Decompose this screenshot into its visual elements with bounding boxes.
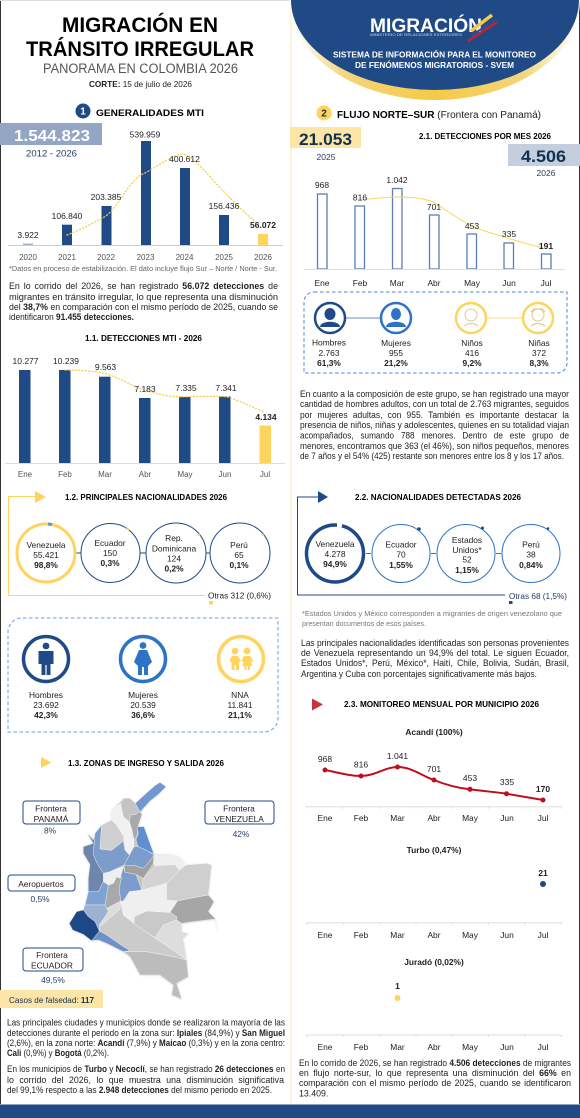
- Perú label: 65: [234, 550, 244, 560]
- nationalities circles: [17, 523, 270, 583]
- dot chart: Juradó: [306, 957, 562, 1052]
- line chart: Acandí: 335: [500, 777, 514, 787]
- line chart: Acandí: 453: [463, 773, 477, 783]
- otras nacionalidades note: Otras 312 (0,6%): [208, 592, 271, 600]
- bar chart: detecciones MTI 2026: 7.335: [175, 383, 197, 393]
- title block: CORTE: 15 de julio de 2026: [89, 79, 192, 89]
- callout: Frontera Panamá: Frontera: [35, 804, 67, 814]
- map: Colombia regions: [69, 782, 218, 999]
- bar chart: detecciones MTI 2026: Jul: [260, 470, 270, 479]
- dot chart: Juradó: Jul: [538, 1042, 548, 1052]
- dot chart: Turbo: Jun: [500, 930, 514, 940]
- bar chart: detecciones por mes: 816: [353, 192, 367, 202]
- region: Cundinamarca: [119, 867, 142, 901]
- dot chart: Juradó: Ene: [318, 1042, 333, 1052]
- dot chart: Juradó: Mar: [390, 1042, 405, 1052]
- paragraph: composición del grupo: menores, encontramos que 363 (el 46%), son niños pequeños, menores: [300, 441, 570, 451]
- bar chart: detecciones anuales: 2021: [58, 253, 76, 262]
- section heading 2: flujo norte-sur: [316, 106, 541, 121]
- República Dominicana label: Dominicana: [152, 544, 196, 554]
- bar chart: detecciones por mes: [304, 175, 565, 288]
- bar chart: detecciones anuales: 2026: [254, 253, 272, 262]
- stat: total 2025: [290, 127, 361, 162]
- Mujeres stats: 36,6%: [131, 710, 155, 720]
- region: La Guajira: [135, 782, 166, 812]
- heading 2.3 with arrow: 2.3. MONITOREO MENSUAL POR MUNICIPIO 2026: [344, 699, 539, 709]
- bar chart: detecciones MTI 2026: [5, 356, 285, 479]
- paragraph: principales nacionalidades: Las principales nacionalidades identificadas son personas provenientes: [301, 638, 570, 648]
- bar chart: detecciones anuales: 2020: [19, 253, 37, 262]
- line chart: Acandí: Ene: [318, 813, 333, 823]
- bar chart: detecciones anuales: [8, 130, 283, 262]
- Hombres stats: [29, 690, 63, 720]
- Venezuela label: Venezuela: [26, 540, 66, 550]
- paragraph: resumen norte-sur: En lo corrido de 2026, se han registrado 4.506 detecciones de migrantes: [299, 1058, 572, 1068]
- heading 1.3 with arrow: [41, 757, 224, 768]
- otras nacionalidades note: Otras 68 (1,5%): [509, 592, 567, 601]
- paragraph: composición del grupo: presencia de niños, niñas y adolescentes, quienes en su totalidad viajan: [300, 420, 569, 430]
- República Dominicana label: 0,2%: [164, 564, 184, 574]
- dot chart: Turbo: [306, 845, 562, 940]
- header banner: [290, 0, 580, 100]
- callout: Frontera Ecuador: 49,5%: [41, 975, 65, 985]
- bar chart: detecciones anuales: 56.072: [250, 220, 276, 230]
- callout: Aeropuertos: Aeropuertos: [18, 879, 64, 889]
- region: Caquetá: [99, 901, 187, 960]
- callout: Frontera Panamá: 8%: [44, 826, 57, 836]
- icon: niños: [456, 303, 486, 333]
- paragraph: ciudades y municipios: Las principales ciudades y municipios donde se realizaron la mayoría de las: [7, 1018, 286, 1028]
- dot chart: Turbo: May: [462, 930, 479, 940]
- region: Vaupés: [155, 920, 188, 960]
- bar chart: detecciones por mes: Abr: [427, 278, 441, 288]
- callout: Aeropuertos: 0,5%: [30, 894, 50, 904]
- logo: Migración: MIGRACIÓN: [370, 15, 482, 37]
- line chart: Acandí: Abr: [427, 813, 441, 823]
- dot chart: Juradó: 1: [395, 981, 400, 991]
- dot chart: Turbo: Jul: [538, 930, 548, 940]
- region: Bolívar: [111, 803, 134, 855]
- paragraph: resumen MTI: identificaron 91.455 detecciones.: [9, 312, 134, 322]
- Estados Unidos label: 52: [462, 554, 472, 564]
- bar chart: detecciones por mes: 968: [315, 180, 329, 190]
- Hombres stats: 23.692: [33, 700, 59, 710]
- banner subtitle: [333, 48, 536, 70]
- Estados Unidos label: 1,15%: [455, 565, 479, 575]
- icon: mujeres: [381, 303, 411, 333]
- callout: Frontera Panamá: PANAMÁ: [34, 814, 69, 824]
- bar chart: detecciones anuales: 2022: [97, 253, 115, 262]
- Niñas stats: [528, 338, 550, 368]
- bar chart: detecciones por mes: 1.042: [386, 175, 408, 185]
- paragraph: principales nacionalidades: Argentina y Cuba con porcentajes significativamente más bajos.: [301, 669, 537, 679]
- paragraph: resumen MTI: del 38,7% en comparación con el mismo período de 2025, cuando se: [9, 302, 278, 312]
- arrow connector: nacionalidades sur: [8, 491, 205, 596]
- NNA stats: [228, 690, 253, 720]
- Niños stats: [461, 338, 483, 368]
- Ecuador label: [94, 538, 126, 568]
- region: Caldas: [103, 867, 123, 885]
- Ecuador label: Ecuador: [94, 538, 126, 548]
- Mujeres stats: Mujeres: [128, 690, 158, 700]
- paragraph: ciudades y municipios: Cali (0,9%) y Bogotá (0,2%).: [7, 1048, 109, 1058]
- footer bar: [0, 1104, 580, 1118]
- footnote: Estados Unidos y México: [302, 609, 562, 628]
- Hombres stats: [312, 338, 346, 368]
- section heading 1: generalidades: 1: [80, 106, 86, 118]
- República Dominicana label: Rep.: [165, 533, 183, 543]
- callout: Aeropuertos: [8, 875, 75, 904]
- paragraph: resumen norte-sur: en flujo norte-sur, lo que representa una disminución del 66% en: [299, 1068, 571, 1078]
- Niñas stats: Niñas: [528, 338, 550, 348]
- Venezuela label: 55.421: [33, 550, 59, 560]
- stat: total 2026: 2026: [537, 168, 556, 178]
- callout: Frontera Ecuador: [23, 948, 83, 985]
- paragraph: resumen MTI: migrantes en tránsito irregular, lo que representa una disminución: [9, 292, 278, 302]
- region: Chocó: [83, 833, 103, 892]
- title block: [26, 13, 254, 89]
- bar chart: detecciones MTI 2026: 10.277: [12, 356, 39, 366]
- region: Cesar: [129, 812, 142, 840]
- stat: total 2026: 4.506: [521, 147, 566, 166]
- paragraph: Turbo y Necoclí: del 99,1% respecto a las 2.948 detecciones del mismo periodo en 2025.: [7, 1085, 272, 1095]
- heading 1.3 with arrow: 1.3. ZONAS DE INGRESO Y SALIDA 2026: [68, 759, 224, 768]
- stat: total 2025: 21.053: [299, 130, 352, 149]
- nationalities circles norte-sur: [306, 524, 560, 582]
- stat: total 2025: 2025: [317, 152, 336, 162]
- stat: total 2012-2026: 1.544.823: [14, 128, 90, 145]
- Ecuador label: Ecuador: [385, 540, 417, 550]
- line chart: Acandí: [306, 727, 562, 823]
- bar chart: detecciones por mes: 453: [465, 221, 479, 231]
- stat: total 2026: [508, 144, 580, 178]
- Perú label: 0,1%: [229, 560, 249, 570]
- callout: Frontera Ecuador: ECUADOR: [31, 960, 73, 970]
- section heading 1: generalidades: GENERALIDADES MTI: [96, 108, 204, 119]
- República Dominicana label: [152, 533, 196, 574]
- Perú label: 0,84%: [519, 560, 543, 570]
- paragraph: principales nacionalidades: Estados Unidos*, Perú, México*, Haití, Chile, Bolivia, Sudán, Brasil,: [301, 658, 569, 668]
- bar chart: detecciones MTI 2026: Mar: [98, 470, 112, 479]
- line chart: Acandí: 816: [354, 760, 368, 770]
- Venezuela label: [315, 539, 355, 569]
- paragraph: composición del grupo: por mujeres adultas, con 955. También es importante destacar la: [300, 410, 569, 420]
- Mujeres stats: 21,2%: [384, 358, 408, 368]
- callout: Frontera Ecuador: Frontera: [36, 950, 68, 960]
- line chart: Acandí: Acandí (100%): [405, 727, 463, 737]
- line chart: Acandí: Jul: [538, 813, 548, 823]
- region: Santander: [124, 847, 154, 868]
- Venezuela label: 4.278: [325, 549, 346, 559]
- line chart: Acandí: 170: [536, 784, 550, 794]
- section heading 2: flujo norte-sur: FLUJO NORTE–SUR (Frontera con Panamá): [337, 110, 541, 121]
- icon: mujeres: [120, 636, 166, 682]
- Hombres stats: 2.763: [319, 348, 340, 358]
- Niños stats: 416: [465, 348, 479, 358]
- paragraph: Turbo y Necoclí: En los municipios de Turbo y Necoclí, se han registrado 26 detecciones en: [7, 1064, 285, 1074]
- dot chart: Turbo: Mar: [390, 930, 405, 940]
- region: Nariño: [69, 910, 99, 941]
- callout: Frontera Panamá: [23, 801, 80, 836]
- dot chart: Juradó: Jun: [500, 1042, 514, 1052]
- Ecuador label: [385, 540, 417, 570]
- region: Meta: [121, 883, 177, 923]
- line chart: Acandí: May: [462, 813, 479, 823]
- Ecuador label: 0,3%: [100, 558, 120, 568]
- paragraph: resumen norte-sur: comparación con el mismo período de 2025, cuando se identificaron: [299, 1078, 571, 1088]
- paragraph: ciudades y municipios: (2,6%), en la zona norte: Acandí (7,9%) y Maicao (0,3%) y en la zona centro:: [7, 1038, 285, 1048]
- bar chart: detecciones anuales: 539.959: [130, 130, 161, 140]
- line chart: Acandí: 1.041: [387, 751, 408, 761]
- icon: hombres: [315, 303, 345, 333]
- line chart: Acandí: 701: [427, 764, 441, 774]
- stat: total 2012-2026: [0, 123, 102, 158]
- region: Guainía: [170, 895, 218, 930]
- arrow connector: nacionalidades norte-sur: [298, 491, 505, 595]
- section heading 2: flujo norte-sur: 2: [321, 108, 327, 120]
- Venezuela label: Venezuela: [315, 539, 355, 549]
- bar chart: detecciones anuales: 106.840: [52, 211, 83, 221]
- dot chart: Turbo: Ene: [318, 930, 333, 940]
- Niñas stats: 372: [532, 348, 546, 358]
- chart footnote: *Datos en proceso de estabilización. El dato incluye flujo Sur – Norte / Norte - Sur.: [9, 266, 277, 273]
- region: Tolima: [105, 877, 122, 908]
- paragraph: Turbo y Necoclí: [7, 1064, 285, 1095]
- line chart: Acandí: Feb: [354, 813, 369, 823]
- bar chart: detecciones MTI 2026: Abr: [139, 470, 152, 479]
- dot chart: Turbo: Feb: [354, 930, 369, 940]
- bar chart: detecciones por mes: Jun: [502, 278, 516, 288]
- title block: TRÁNSITO IRREGULAR: [26, 38, 254, 61]
- dot chart: Turbo: Turbo (0,47%): [407, 845, 462, 855]
- bar chart: detecciones anuales: 2023: [137, 253, 155, 262]
- region: Guaviare: [134, 911, 177, 938]
- bar chart: detecciones MTI 2026: Feb: [58, 470, 72, 479]
- region: Cauca: [83, 905, 108, 931]
- paragraph: resumen MTI: [9, 281, 278, 322]
- region: Magdalena: [121, 798, 140, 822]
- bar chart: detecciones anuales: 2024: [176, 253, 194, 262]
- callout: Frontera Venezuela: 42%: [233, 829, 250, 839]
- dot chart: Juradó: May: [462, 1042, 479, 1052]
- dot chart: Turbo: Abr: [427, 930, 441, 940]
- Ecuador label: 1,55%: [389, 560, 413, 570]
- Estados Unidos label: Unidos*: [452, 545, 482, 555]
- NNA stats: 21,1%: [228, 710, 252, 720]
- bar chart: detecciones anuales: 400.612: [169, 154, 200, 164]
- Perú label: 38: [526, 550, 536, 560]
- bar chart: detecciones anuales: 203.385: [91, 192, 122, 202]
- heading 2.3 with arrow: [312, 698, 539, 710]
- paragraph: composición del grupo: En cuanto a la composición de este grupo, se han registrado una mayor: [300, 389, 569, 399]
- title block: PANORAMA EN COLOMBIA 2026: [43, 61, 238, 76]
- paragraph: Turbo y Necoclí: lo corrido del 2026, lo que muestra una disminución significativa: [7, 1075, 284, 1085]
- Estados Unidos label: Estados: [452, 535, 482, 545]
- Perú label: [229, 540, 249, 570]
- Ecuador label: 70: [396, 550, 406, 560]
- bar chart: detecciones por mes: 191: [539, 241, 553, 251]
- bar chart: detecciones por mes: Ene: [315, 278, 330, 288]
- icon: niñas: [523, 303, 553, 333]
- paragraph: composición del grupo: cantidad de hombres adultos, con un total de 2.763 migrantes, seguidos: [300, 399, 570, 409]
- Niños stats: Niños: [461, 338, 483, 348]
- bar chart: detecciones anuales: 2025: [215, 253, 233, 262]
- NNA stats: NNA: [231, 690, 249, 700]
- callout: casos de falsedad: [0, 990, 103, 1008]
- Mujeres stats: [128, 690, 158, 720]
- line chart: Acandí: 968: [318, 754, 332, 764]
- paragraph: principales nacionalidades: [301, 638, 570, 679]
- Hombres stats: Hombres: [312, 338, 346, 348]
- title block: MIGRACIÓN EN: [62, 13, 218, 37]
- line chart: Acandí: Mar: [390, 813, 405, 823]
- paragraph: composición del grupo: de 7 años y el 54% (425) restante son menores entre los 8 y los 17 años.: [300, 451, 564, 461]
- banner subtitle: DE FENÓMENOS MIGRATORIOS - SVEM: [355, 59, 514, 70]
- Mujeres stats: Mujeres: [381, 338, 411, 348]
- Niños stats: 9,2%: [462, 358, 482, 368]
- Venezuela label: 98,8%: [34, 560, 58, 570]
- Mujeres stats: 955: [389, 348, 403, 358]
- paragraph: composición del grupo: [300, 389, 570, 461]
- Ecuador label: 150: [103, 548, 117, 558]
- bar chart: detecciones MTI 2026: 7.183: [134, 384, 156, 394]
- footnote: Estados Unidos y México: *Estados Unidos y México corresponden a migrantes de origen venezolano que: [302, 609, 562, 618]
- bar chart: detecciones anuales: 156.436: [209, 201, 240, 211]
- callout: Frontera Venezuela: VENEZUELA: [214, 814, 264, 824]
- Venezuela label: 94,9%: [323, 559, 347, 569]
- bar chart: detecciones por mes: May: [464, 278, 481, 288]
- otras nacionalidades note: [208, 592, 271, 604]
- region: Norte de Santander: [136, 827, 154, 854]
- region: Arauca: [153, 854, 186, 870]
- heading 2.1: 2.1. DETECCIONES POR MES 2026: [419, 132, 552, 141]
- region: Boyacá: [124, 855, 154, 878]
- Mujeres stats: [381, 338, 411, 368]
- paragraph: resumen norte-sur: 13.409.: [299, 1088, 328, 1098]
- Perú label: [519, 540, 543, 570]
- region: Huila: [99, 901, 121, 925]
- bar chart: detecciones MTI 2026: 10.239: [53, 356, 79, 366]
- region: Valle: [85, 882, 108, 905]
- NNA stats: 11.841: [228, 700, 253, 710]
- heading 1.1: 1.1. DETECCIONES MTI - 2026: [85, 333, 202, 343]
- bar chart: detecciones MTI 2026: Jun: [219, 470, 231, 479]
- paragraph: principales nacionalidades: de Venezuela representando un 94,9% del total. Le siguen Ecuador,: [301, 648, 569, 658]
- Hombres stats: 61,3%: [317, 358, 341, 368]
- Perú label: Perú: [230, 540, 248, 550]
- dot chart: Juradó: Abr: [427, 1042, 441, 1052]
- Estados Unidos label: [452, 535, 482, 575]
- bar chart: detecciones por mes: 701: [427, 202, 441, 212]
- panel: composición flujo norte-sur: [304, 292, 567, 373]
- region: Amazonas: [123, 952, 188, 999]
- paragraph: resumen norte-sur: [299, 1058, 572, 1098]
- República Dominicana label: 124: [167, 554, 181, 564]
- callout: Frontera Venezuela: Frontera: [223, 804, 255, 814]
- region: Casanare: [142, 864, 179, 890]
- paragraph: ciudades y municipios: [7, 1018, 286, 1058]
- Mujeres stats: 20.539: [130, 700, 156, 710]
- bar chart: detecciones por mes: Jul: [541, 278, 551, 288]
- banner subtitle: SISTEMA DE INFORMACIÓN PARA EL MONITOREO: [333, 48, 536, 60]
- callout: Frontera Venezuela: [205, 801, 274, 839]
- icon: hombres: [24, 636, 68, 682]
- bar chart: detecciones MTI 2026: 9.563: [95, 362, 116, 372]
- dot chart: Juradó: Juradó (0,02%): [404, 957, 464, 967]
- bar chart: detecciones por mes: Mar: [390, 278, 404, 288]
- Perú label: Perú: [522, 540, 540, 550]
- paragraph: ciudades y municipios: detecciones durante el periodo en la zona sur: Ipiales (84,9%) y San Miguel: [7, 1028, 285, 1038]
- region: Antioquia: [93, 825, 129, 873]
- region: Putumayo: [92, 931, 130, 952]
- bar chart: detecciones por mes: 335: [502, 229, 516, 239]
- region: Vichada: [167, 863, 212, 901]
- dot chart: Turbo: 21: [538, 868, 548, 878]
- section heading 1: generalidades: [76, 104, 204, 119]
- heading 1.2: 1.2. PRINCIPALES NACIONALIDADES 2026: [65, 493, 227, 502]
- heading 2.2: 2.2. NACIONALIDADES DETECTADAS 2026: [355, 493, 521, 502]
- bar chart: detecciones por mes: Feb: [353, 278, 368, 288]
- bar chart: detecciones MTI 2026: 4.134: [255, 412, 277, 422]
- footnote: Estados Unidos y México: presentan documentos de esos países.: [302, 619, 426, 628]
- Hombres stats: Hombres: [29, 690, 63, 700]
- bar chart: detecciones MTI 2026: May: [177, 470, 193, 479]
- Hombres stats: 42,3%: [34, 710, 58, 720]
- callout: casos de falsedad: Casos de falsedad: 117: [9, 996, 95, 1005]
- bar chart: detecciones anuales: 3.922: [17, 230, 39, 240]
- panel: composición MTI: [8, 618, 278, 732]
- logo: Migración: MINISTERIO DE RELACIONES EXTERIORES: [370, 33, 463, 37]
- line chart: Acandí: Jun: [500, 813, 514, 823]
- Venezuela label: [26, 540, 66, 570]
- icon: NNA: [218, 636, 264, 682]
- bar chart: detecciones MTI 2026: Ene: [18, 470, 33, 479]
- region: Córdoba: [100, 820, 124, 850]
- bar chart: detecciones MTI 2026: 7.341: [215, 383, 237, 393]
- stat: total 2012-2026: 2012 - 2026: [26, 148, 77, 158]
- dot chart: Juradó: Feb: [354, 1042, 369, 1052]
- paragraph: resumen MTI: En lo corrido del 2026, se han registrado 56.072 detecciones de: [9, 281, 278, 291]
- Niñas stats: 8,3%: [529, 358, 549, 368]
